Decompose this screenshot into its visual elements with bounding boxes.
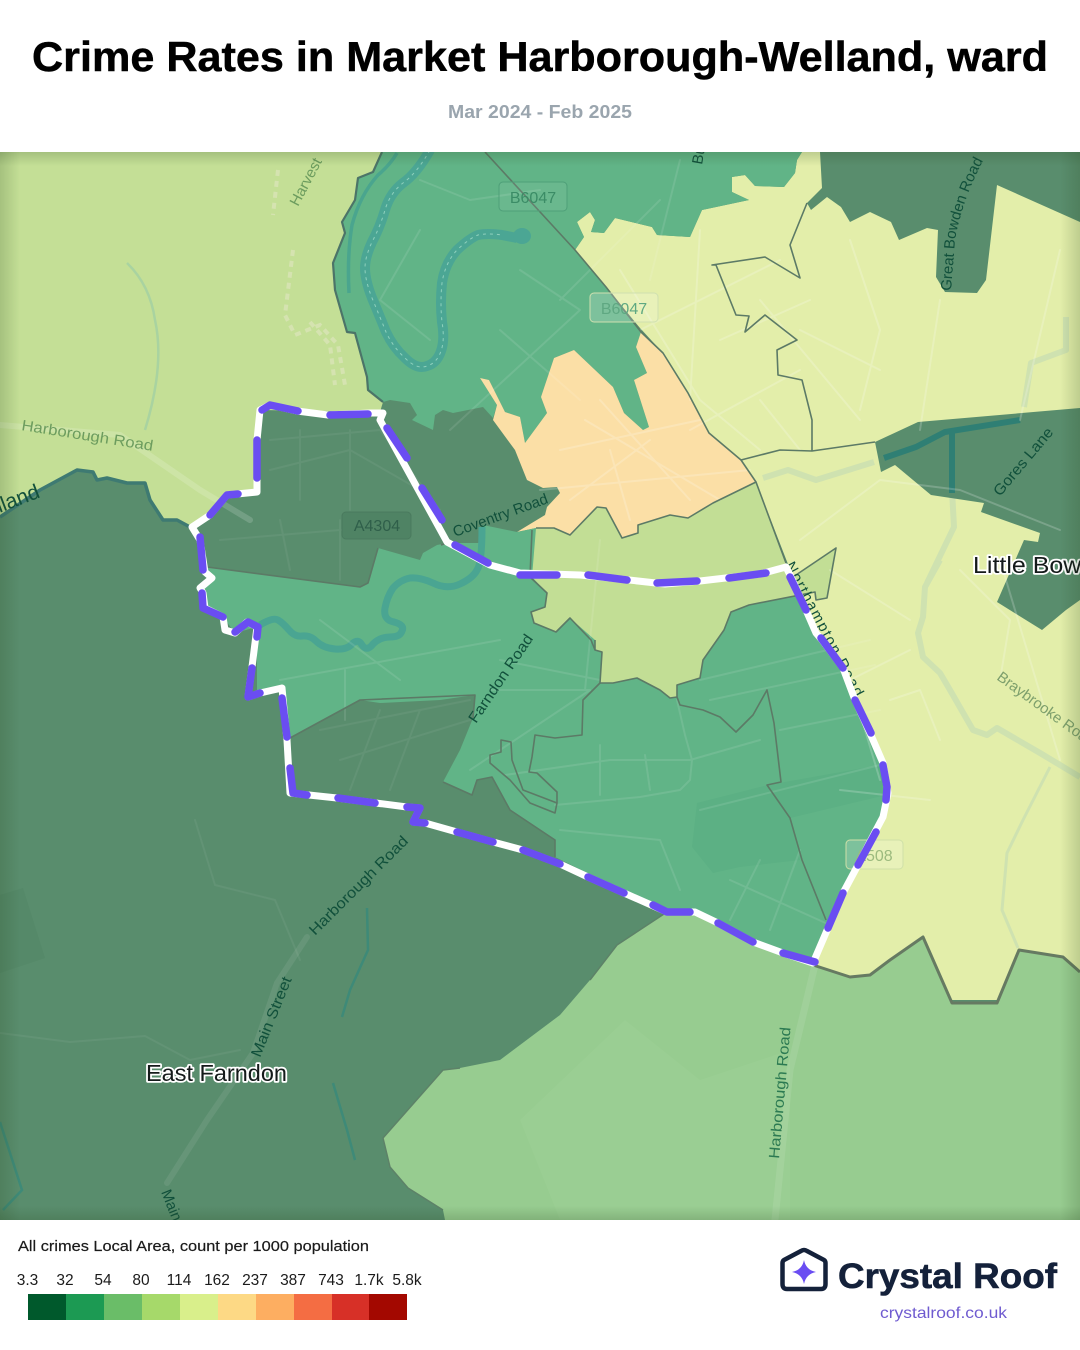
- region: south green: [383, 912, 1080, 1220]
- wordmark: Crystal Roof: [838, 1257, 1057, 1296]
- legend tick labels: 80: [132, 1272, 150, 1289]
- river: pale east streams: [763, 317, 1080, 777]
- legend tick labels: 54: [94, 1272, 112, 1289]
- label: Great Bowden Road: Great Bowden Road: [941, 156, 983, 290]
- shield: B6047 south: [590, 293, 658, 322]
- ward outline: purple dashes: [200, 405, 887, 962]
- legend colour bar: [28, 1294, 407, 1320]
- legend tick labels: 387: [280, 1272, 306, 1289]
- region: north mid green: [333, 152, 802, 443]
- region: north-west light green: [0, 152, 383, 527]
- river: thin south-east stream: [1002, 767, 1050, 948]
- rivers: south-west streams: [0, 908, 368, 1210]
- shield: A4304: [342, 512, 411, 539]
- legend: [17, 1238, 422, 1320]
- region: darker field in south-west: [0, 888, 45, 973]
- label: Harvest: Harvest: [287, 155, 326, 209]
- shield: B6047 north: [499, 182, 567, 211]
- river: east channel: [884, 420, 1020, 493]
- region: east yellow: [575, 152, 1080, 1000]
- river: loop in north: [365, 150, 531, 367]
- road shields: [342, 182, 903, 869]
- label: Harborough Road south-west: Harborough Road: [306, 833, 412, 939]
- region: paler field in south green: [520, 1020, 790, 1220]
- label: Farndon Road: Farndon Road: [465, 631, 537, 726]
- legend tick labels: 114: [167, 1272, 192, 1289]
- title: Crime Rates in Market Harborough-Welland, ward: [32, 33, 1048, 80]
- subtitle: date range: Mar 2024 - Feb 2025: [448, 102, 632, 122]
- region: darker patches in south ward: [692, 765, 886, 873]
- legend tick labels: 32: [56, 1272, 74, 1289]
- region: south mid green: [200, 525, 888, 965]
- shield: A4304: A4304: [354, 518, 400, 535]
- shield: B6047 south: B6047: [601, 301, 647, 318]
- legend tick labels: 5.8k: [392, 1272, 422, 1289]
- label: road fragment top: Burnmill: [689, 109, 715, 166]
- label: Coventry Road: Coventry Road: [451, 491, 550, 541]
- ward outline: white base line: [192, 405, 888, 963]
- river: dark western boundary: [0, 470, 190, 527]
- place label: East Farndon: East Farndon: [146, 1060, 287, 1086]
- label: Main: Main: [157, 1187, 185, 1224]
- shield: A508: [846, 840, 903, 869]
- label: Main Street: Main Street: [248, 973, 296, 1059]
- shield: B6047 north: B6047: [510, 190, 556, 207]
- legend title: All crimes Local Area, count per 1000 population: [18, 1238, 369, 1255]
- legend tick labels: 743: [318, 1272, 344, 1289]
- legend tick labels: 1.7k: [354, 1272, 384, 1289]
- road network: [0, 160, 1060, 1220]
- label: Harborough Road south: Harborough Road: [766, 1026, 794, 1159]
- footpath: harvest dashed track: [273, 170, 345, 385]
- ward outline: [192, 405, 888, 963]
- label: Northampton Road on ward edge: Northampton Road: [781, 559, 867, 699]
- river: through ward: [260, 527, 482, 649]
- brand: Crystal Roof logo: [782, 1250, 1057, 1322]
- river: west channel: [348, 153, 397, 293]
- boundary lines: [207, 152, 1080, 1210]
- shield: A508: A508: [855, 848, 893, 865]
- icon: house with star: [782, 1250, 826, 1289]
- label: Gores Lane: Gores Lane: [990, 424, 1057, 500]
- website url: crystalroof.co.uk: [880, 1305, 1008, 1322]
- region: central light green: [531, 482, 836, 698]
- region: dark green low-crime base: [0, 152, 1080, 1220]
- edge shading: vignette: [0, 152, 1080, 1220]
- legend tick labels: 237: [242, 1272, 268, 1289]
- stream: north-west pale stream: [127, 263, 158, 430]
- legend tick labels: 162: [204, 1272, 230, 1289]
- label: Harborough Road west: Harborough Road: [20, 417, 154, 455]
- legend tick labels: 3.3: [17, 1272, 38, 1289]
- region: town centre orange: [480, 332, 756, 538]
- legend tick labels: [17, 1272, 422, 1289]
- region: east dark green: [875, 408, 1080, 630]
